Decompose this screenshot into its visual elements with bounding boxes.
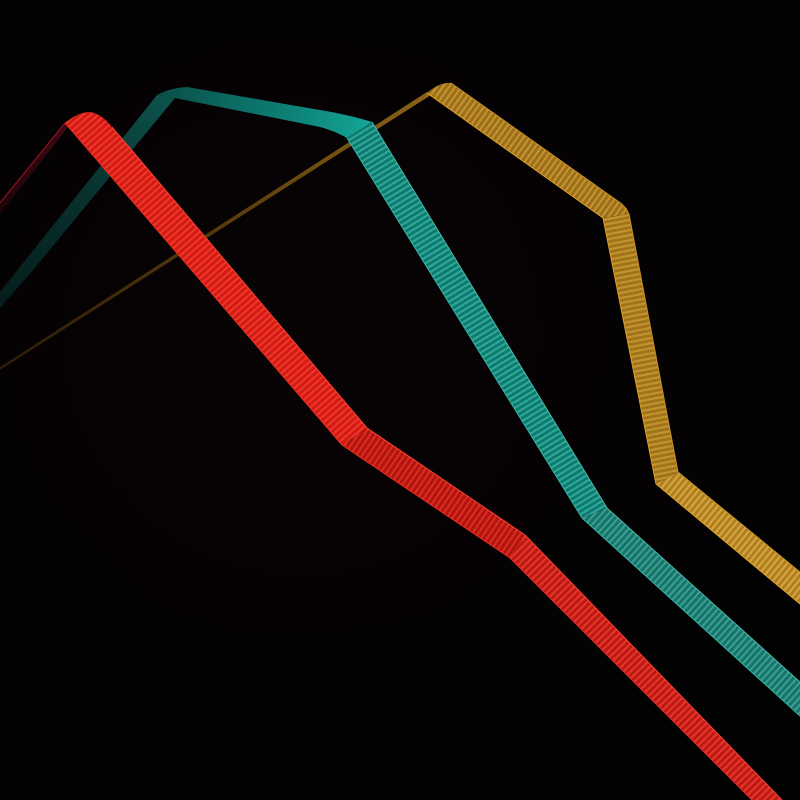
teal ribbon top fold <box>157 87 372 138</box>
teal ribbon edges <box>347 122 800 716</box>
teal ribbon receding back section <box>0 95 175 308</box>
gold ribbon upper slope <box>427 83 629 218</box>
gold ribbon steep drop <box>603 214 678 484</box>
red ribbon edges <box>65 123 782 800</box>
red ribbon long diagonal <box>65 112 367 445</box>
teal ribbon <box>0 87 800 716</box>
gold ribbon <box>0 83 800 604</box>
teal ribbon lower run <box>582 508 800 716</box>
red ribbon lower run <box>510 535 782 800</box>
gold ribbon edges <box>427 83 800 604</box>
red ribbon receding back section <box>0 123 69 214</box>
teal ribbon long diagonal <box>347 122 607 518</box>
gold ribbon lower run <box>656 472 800 604</box>
red ribbon back edge highlight <box>0 123 65 203</box>
gold ribbon thin receding strand <box>0 92 431 370</box>
red ribbon middle run <box>342 428 525 558</box>
